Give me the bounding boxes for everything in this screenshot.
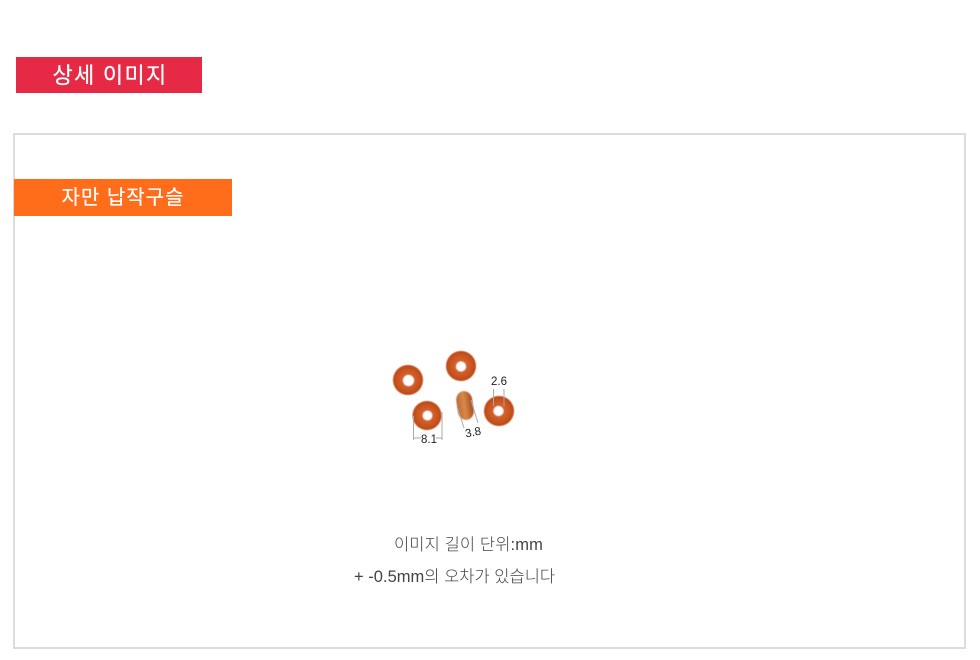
heading: product name — [14, 179, 232, 216]
dimension: 2.6: 2.6 — [491, 376, 507, 388]
caption: image length unit: 이미지 길이 단위:mm — [394, 536, 543, 554]
heading: detail image: 상세 이미지 — [52, 63, 168, 88]
caption: tolerance note: + -0.5mm의 오차가 있습니다 — [354, 568, 555, 586]
bead: bottom left — [412, 401, 442, 430]
bead: right — [484, 396, 514, 426]
bead: side view — [455, 390, 475, 421]
dimension: 3.8 — [457, 400, 482, 440]
bead: top centre — [446, 351, 476, 381]
bead: top left — [393, 365, 423, 395]
dimension: 8.1: 8.1 — [421, 434, 437, 446]
product photo: beads with dimensions — [392, 350, 515, 446]
dimension: 3.8: 3.8 — [464, 426, 482, 440]
heading: detail image — [16, 57, 202, 93]
heading: product name: 자만 납작구슬 — [62, 187, 184, 209]
panel: product detail frame — [13, 133, 966, 649]
dimension: 8.1 — [414, 412, 442, 446]
dimension: 2.6 — [491, 376, 507, 406]
